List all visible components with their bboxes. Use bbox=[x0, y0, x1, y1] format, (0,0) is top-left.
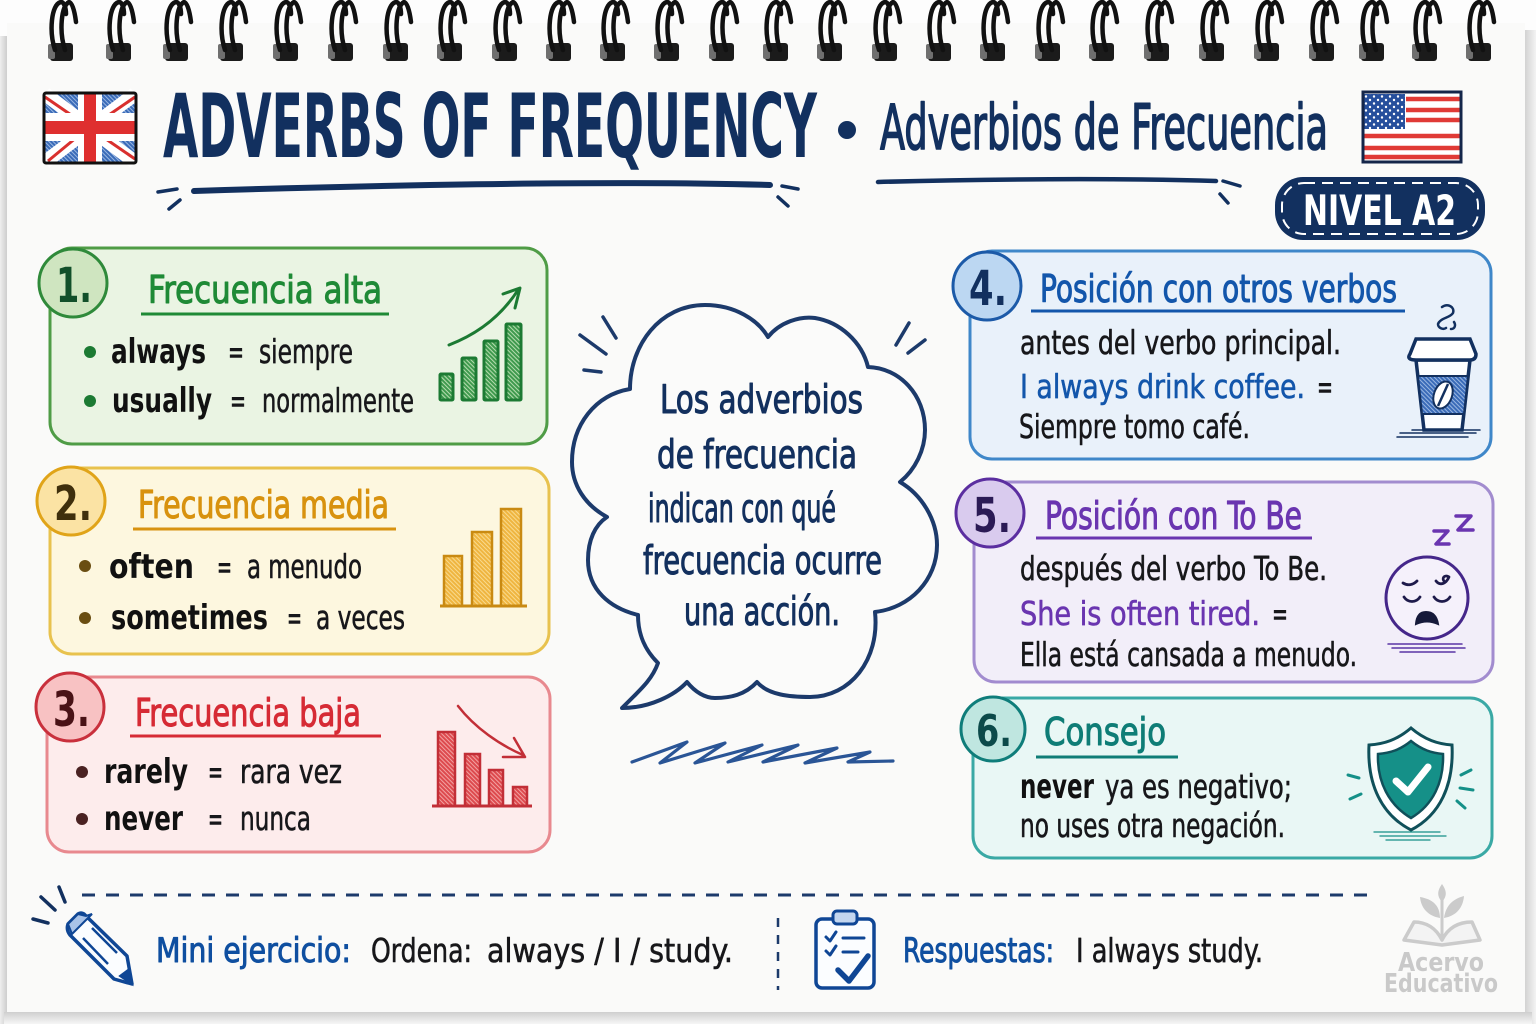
number badge 5: 5. bbox=[973, 488, 1011, 544]
list: low frequency adverbs: = bbox=[208, 799, 223, 838]
list: low frequency adverbs: = bbox=[208, 752, 223, 791]
icon: clipboard checklist bbox=[816, 911, 874, 988]
answers bbox=[903, 931, 1263, 971]
list: high frequency adverbs bbox=[84, 332, 414, 421]
icon: shield with check bbox=[1348, 728, 1473, 840]
explanation text: I always drink coffee. bbox=[1020, 367, 1305, 406]
explanation text bbox=[1020, 767, 1292, 845]
list: medium frequency adverbs: = bbox=[217, 547, 232, 586]
number badge 5 bbox=[956, 479, 1024, 547]
bubble emphasis ticks bbox=[580, 317, 925, 372]
main title: ADVERBS OF FREQUENCY bbox=[163, 75, 818, 178]
explanation text: She is often tired. bbox=[1020, 594, 1260, 633]
explanation text: no uses otra negación. bbox=[1020, 806, 1285, 845]
list: medium frequency adverbs bbox=[79, 547, 405, 638]
explanation text: = bbox=[1317, 367, 1333, 406]
bubble text: Los adverbios bbox=[660, 378, 863, 423]
chart: falling bars bbox=[432, 706, 532, 806]
mini exercise: Mini ejercicio: bbox=[156, 931, 351, 971]
number badge 6 bbox=[961, 697, 1025, 761]
list: high frequency adverbs: = bbox=[230, 381, 246, 420]
panel 3: frecuencia baja bbox=[36, 673, 550, 852]
explanation text: después del verbo To Be. bbox=[1020, 549, 1327, 588]
number badge 1 bbox=[39, 249, 107, 317]
heading: Frecuencia media bbox=[138, 483, 389, 527]
explanation text bbox=[1020, 549, 1357, 674]
icon: coffee cup bbox=[1397, 305, 1480, 437]
watermark: acervo educativo: Educativo bbox=[1384, 969, 1498, 999]
answers: Respuestas: bbox=[903, 931, 1054, 971]
heading: Posición con To Be bbox=[1045, 494, 1302, 538]
number badge 1: 1. bbox=[56, 258, 92, 314]
bubble text: de frecuencia bbox=[657, 433, 857, 478]
chart: rising bars bbox=[440, 288, 521, 400]
number badge 2: 2. bbox=[54, 476, 92, 532]
mini exercise: always / I / study. bbox=[487, 931, 733, 970]
list: low frequency adverbs: never bbox=[104, 799, 184, 839]
explanation text bbox=[1019, 323, 1341, 446]
panel 6: consejo bbox=[961, 697, 1492, 858]
list: medium frequency adverbs: a menudo bbox=[247, 547, 362, 586]
icon: sleepy face bbox=[1386, 516, 1473, 652]
panel 5: posicion con to be bbox=[956, 479, 1493, 682]
heading: Consejo bbox=[1044, 710, 1166, 754]
scribble under bubble bbox=[632, 742, 893, 763]
bottom dashed divider bbox=[82, 894, 1367, 896]
bubble text: indican con qué bbox=[648, 487, 836, 532]
mini exercise bbox=[156, 931, 733, 971]
answers: I always study. bbox=[1076, 931, 1263, 970]
list: medium frequency adverbs: = bbox=[287, 598, 302, 637]
number badge 4: 4. bbox=[969, 261, 1007, 317]
list: high frequency adverbs: usually bbox=[112, 381, 212, 421]
panel 4: posicion con otros verbos bbox=[953, 251, 1491, 459]
badge: nivel A2 bbox=[1275, 177, 1485, 240]
explanation text: Ella está cansada a menudo. bbox=[1020, 635, 1357, 674]
number badge 3 bbox=[36, 673, 104, 741]
list: low frequency adverbs bbox=[76, 752, 342, 839]
list: low frequency adverbs: rara vez bbox=[240, 752, 342, 791]
explanation text: = bbox=[1272, 594, 1288, 633]
list: medium frequency adverbs: sometimes bbox=[111, 598, 268, 638]
panel 1: frecuencia alta bbox=[39, 248, 547, 444]
number badge 4 bbox=[953, 252, 1021, 320]
panel 2: frecuencia media bbox=[37, 467, 549, 654]
bubble text: frecuencia ocurre bbox=[643, 539, 882, 584]
list: high frequency adverbs: normalmente bbox=[262, 381, 414, 420]
number badge 6: 6. bbox=[976, 706, 1012, 757]
heading: Frecuencia baja bbox=[135, 691, 361, 735]
bubble text bbox=[643, 378, 882, 635]
badge: nivel A2: NIVEL A2 bbox=[1303, 186, 1456, 235]
heading: Posición con otros verbos bbox=[1040, 267, 1397, 311]
list: high frequency adverbs: siempre bbox=[259, 332, 353, 371]
number badge 3: 3. bbox=[53, 682, 90, 738]
title underlines bbox=[158, 179, 1240, 209]
watermark: acervo educativo: Acervo bbox=[1398, 948, 1484, 978]
chart: medium bars bbox=[440, 509, 527, 606]
list: low frequency adverbs: nunca bbox=[240, 799, 311, 838]
icon: UK flag bbox=[44, 93, 136, 163]
central speech bubble bbox=[572, 305, 937, 708]
explanation text: Siempre tomo café. bbox=[1019, 407, 1250, 446]
list: high frequency adverbs: always bbox=[111, 332, 206, 372]
mini exercise: Ordena: bbox=[371, 931, 472, 970]
list: low frequency adverbs: rarely bbox=[104, 752, 188, 792]
title separator dot bbox=[838, 121, 856, 139]
heading: Frecuencia alta bbox=[148, 268, 382, 312]
number badge 2 bbox=[37, 467, 105, 535]
watermark: acervo educativo bbox=[1384, 884, 1498, 999]
explanation text: ya es negativo; bbox=[1105, 767, 1292, 806]
bubble text: una acción. bbox=[684, 590, 840, 635]
list: medium frequency adverbs: a veces bbox=[316, 598, 405, 637]
list: medium frequency adverbs: often bbox=[109, 547, 194, 587]
explanation text: antes del verbo principal. bbox=[1020, 323, 1341, 362]
spiral binding bbox=[48, 2, 1494, 61]
list: high frequency adverbs: = bbox=[228, 332, 244, 371]
icon: US flag bbox=[1363, 92, 1461, 162]
vertical dashed divider bbox=[777, 918, 779, 990]
explanation text: never bbox=[1020, 767, 1095, 807]
icon: pencil bbox=[33, 887, 132, 984]
